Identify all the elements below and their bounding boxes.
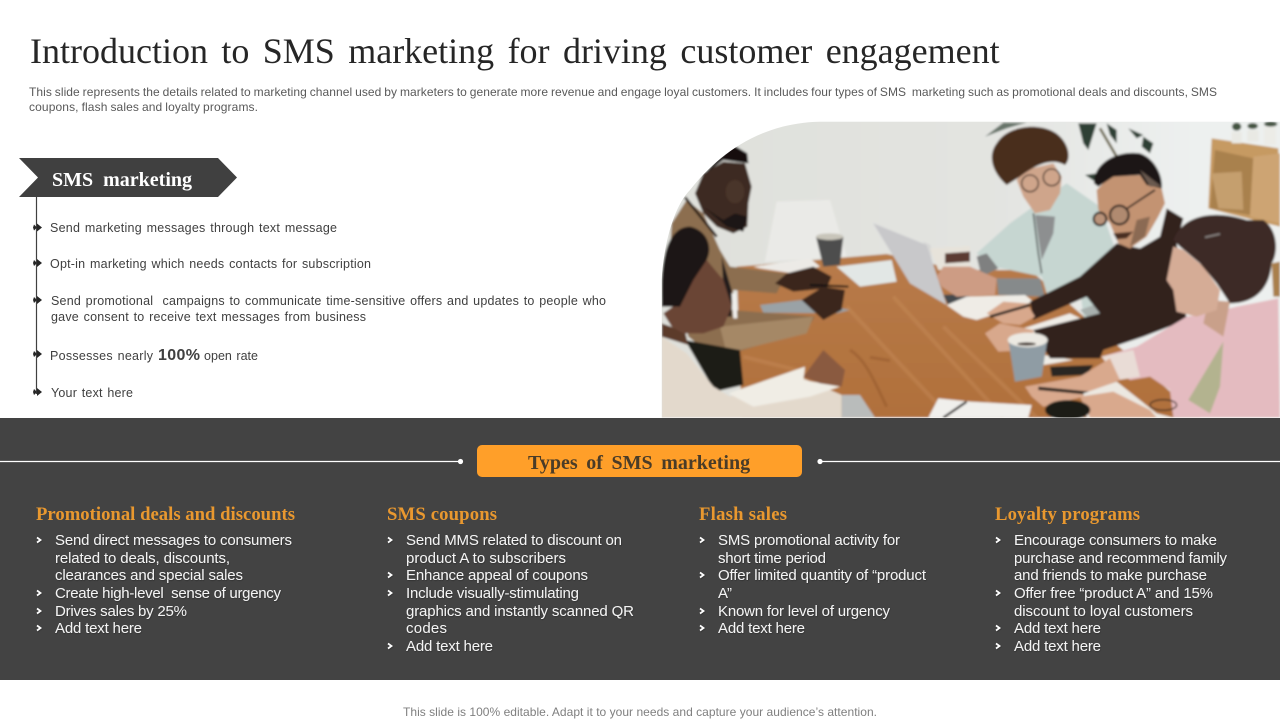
bullet: open rate: Possesses nearly <box>50 349 154 363</box>
bullet: open rate: open rate <box>204 349 258 363</box>
list: coupons: Send MMS related to discount on <box>406 532 622 549</box>
list: flash sales: Add text here <box>718 620 805 637</box>
bullet: promotional campaigns <box>33 294 606 324</box>
column: loyalty programs: Loyalty programs <box>995 504 1140 525</box>
list: promotional: Drives sales by 25% <box>55 603 187 620</box>
banner: SMS marketing <box>19 158 237 197</box>
list: coupons: Add text here <box>406 638 493 655</box>
column: SMS coupons <box>387 504 634 655</box>
person: man in tan jacket <box>670 145 848 357</box>
column: SMS coupons: SMS coupons <box>387 504 497 525</box>
list: flash sales: SMS promotional activity for <box>718 532 900 549</box>
list: flash sales: short time period <box>718 550 826 567</box>
description text <box>29 85 1217 114</box>
column: flash sales: Flash sales <box>699 504 787 525</box>
list: promotional <box>37 532 292 637</box>
bullet: promotional campaigns: Send promotional campaigns to communicate time-sensitive offers and updates to people who <box>51 294 606 308</box>
list: promotional: clearances and special sales <box>55 567 243 584</box>
list: flash sales: Offer limited quantity of “product <box>718 567 927 584</box>
description text: This slide represents the details related to marketing channel used by marketers to generate more revenue and engage loyal customers. It includes four types of SMS marketing such as promotional deals and discounts, SMS <box>29 85 1217 99</box>
connector right <box>817 459 1280 464</box>
list: loyalty: Add text here <box>1014 638 1101 655</box>
list: coupons: product A to subscribers <box>406 550 566 567</box>
bullet: your text here: Your text here <box>51 386 133 400</box>
photo: team meeting around a table <box>653 113 1280 427</box>
column: promotional deals and discounts <box>36 504 295 637</box>
table <box>737 254 1200 418</box>
notebook <box>946 294 1082 366</box>
person: woman in foreground <box>661 227 875 418</box>
list: loyalty: and friends to make purchase <box>1014 567 1207 584</box>
dark mug <box>816 233 843 267</box>
list: promotional: related to deals, discounts, <box>55 550 230 567</box>
laptop <box>873 223 970 305</box>
person: man in dark turtleneck <box>985 153 1187 358</box>
heading pill: Types of SMS marketing <box>477 445 802 477</box>
column: promotional deals and discounts: Promotional deals and discounts <box>36 504 295 525</box>
list: coupons: graphics and instantly scanned QR <box>406 603 634 620</box>
list: flash sales: Known for level of urgency <box>718 603 890 620</box>
title: Introduction to SMS marketing for driving customer engagement <box>30 31 1000 71</box>
plant <box>985 123 1153 182</box>
bullet: open rate: 100% <box>158 347 200 364</box>
list: loyalty: Add text here <box>1014 620 1101 637</box>
wall <box>653 113 1280 427</box>
list: flash sales: A” <box>718 585 732 602</box>
list: loyalty: Encourage consumers to make <box>1014 532 1217 549</box>
list: coupons: Enhance appeal of coupons <box>406 567 588 584</box>
column: flash sales <box>699 504 927 637</box>
connector left <box>0 459 463 464</box>
list: loyalty: purchase and recommend family <box>1014 550 1228 567</box>
timeline rule <box>36 196 38 394</box>
bullet: open rate <box>33 347 258 364</box>
footer note: This slide is 100% editable. Adapt it to your needs and capture your audience’s attention. <box>403 705 877 719</box>
bullet: text message: Send marketing messages through text message <box>50 221 337 235</box>
person: woman in pink jacket <box>1025 215 1280 420</box>
grey mug <box>1008 333 1048 382</box>
list: promotional: Create high-level sense of urgency <box>55 585 282 602</box>
list: promotional: Send direct messages to consumers <box>55 532 292 549</box>
bullet: opt-in: Opt-in marketing which needs contacts for subscription <box>50 257 371 271</box>
panel: types of SMS marketing <box>0 418 1280 680</box>
person: curly-haired woman <box>937 127 1125 328</box>
chair <box>765 200 847 262</box>
list: loyalty: Offer free “product A” and 15% <box>1014 585 1213 602</box>
description text: coupons, flash sales and loyalty programs. <box>29 100 258 114</box>
list: promotional: Add text here <box>55 620 142 637</box>
heading pill: Types of SMS marketing: Types of SMS marketing <box>528 452 750 474</box>
list: loyalty: discount to loyal customers <box>1014 603 1193 620</box>
list: loyalty <box>996 532 1228 655</box>
bullet: promotional campaigns: gave consent to receive text messages from business <box>51 310 366 324</box>
panel: SMS marketing <box>19 158 606 400</box>
column: loyalty programs <box>995 504 1228 655</box>
list: coupons <box>388 532 634 655</box>
banner: SMS marketing: SMS marketing <box>52 169 192 191</box>
list: coupons: Include visually-stimulating <box>406 585 579 602</box>
list: coupons: codes <box>406 620 447 637</box>
list: flash sales <box>700 532 927 637</box>
bookshelf <box>1208 121 1280 227</box>
